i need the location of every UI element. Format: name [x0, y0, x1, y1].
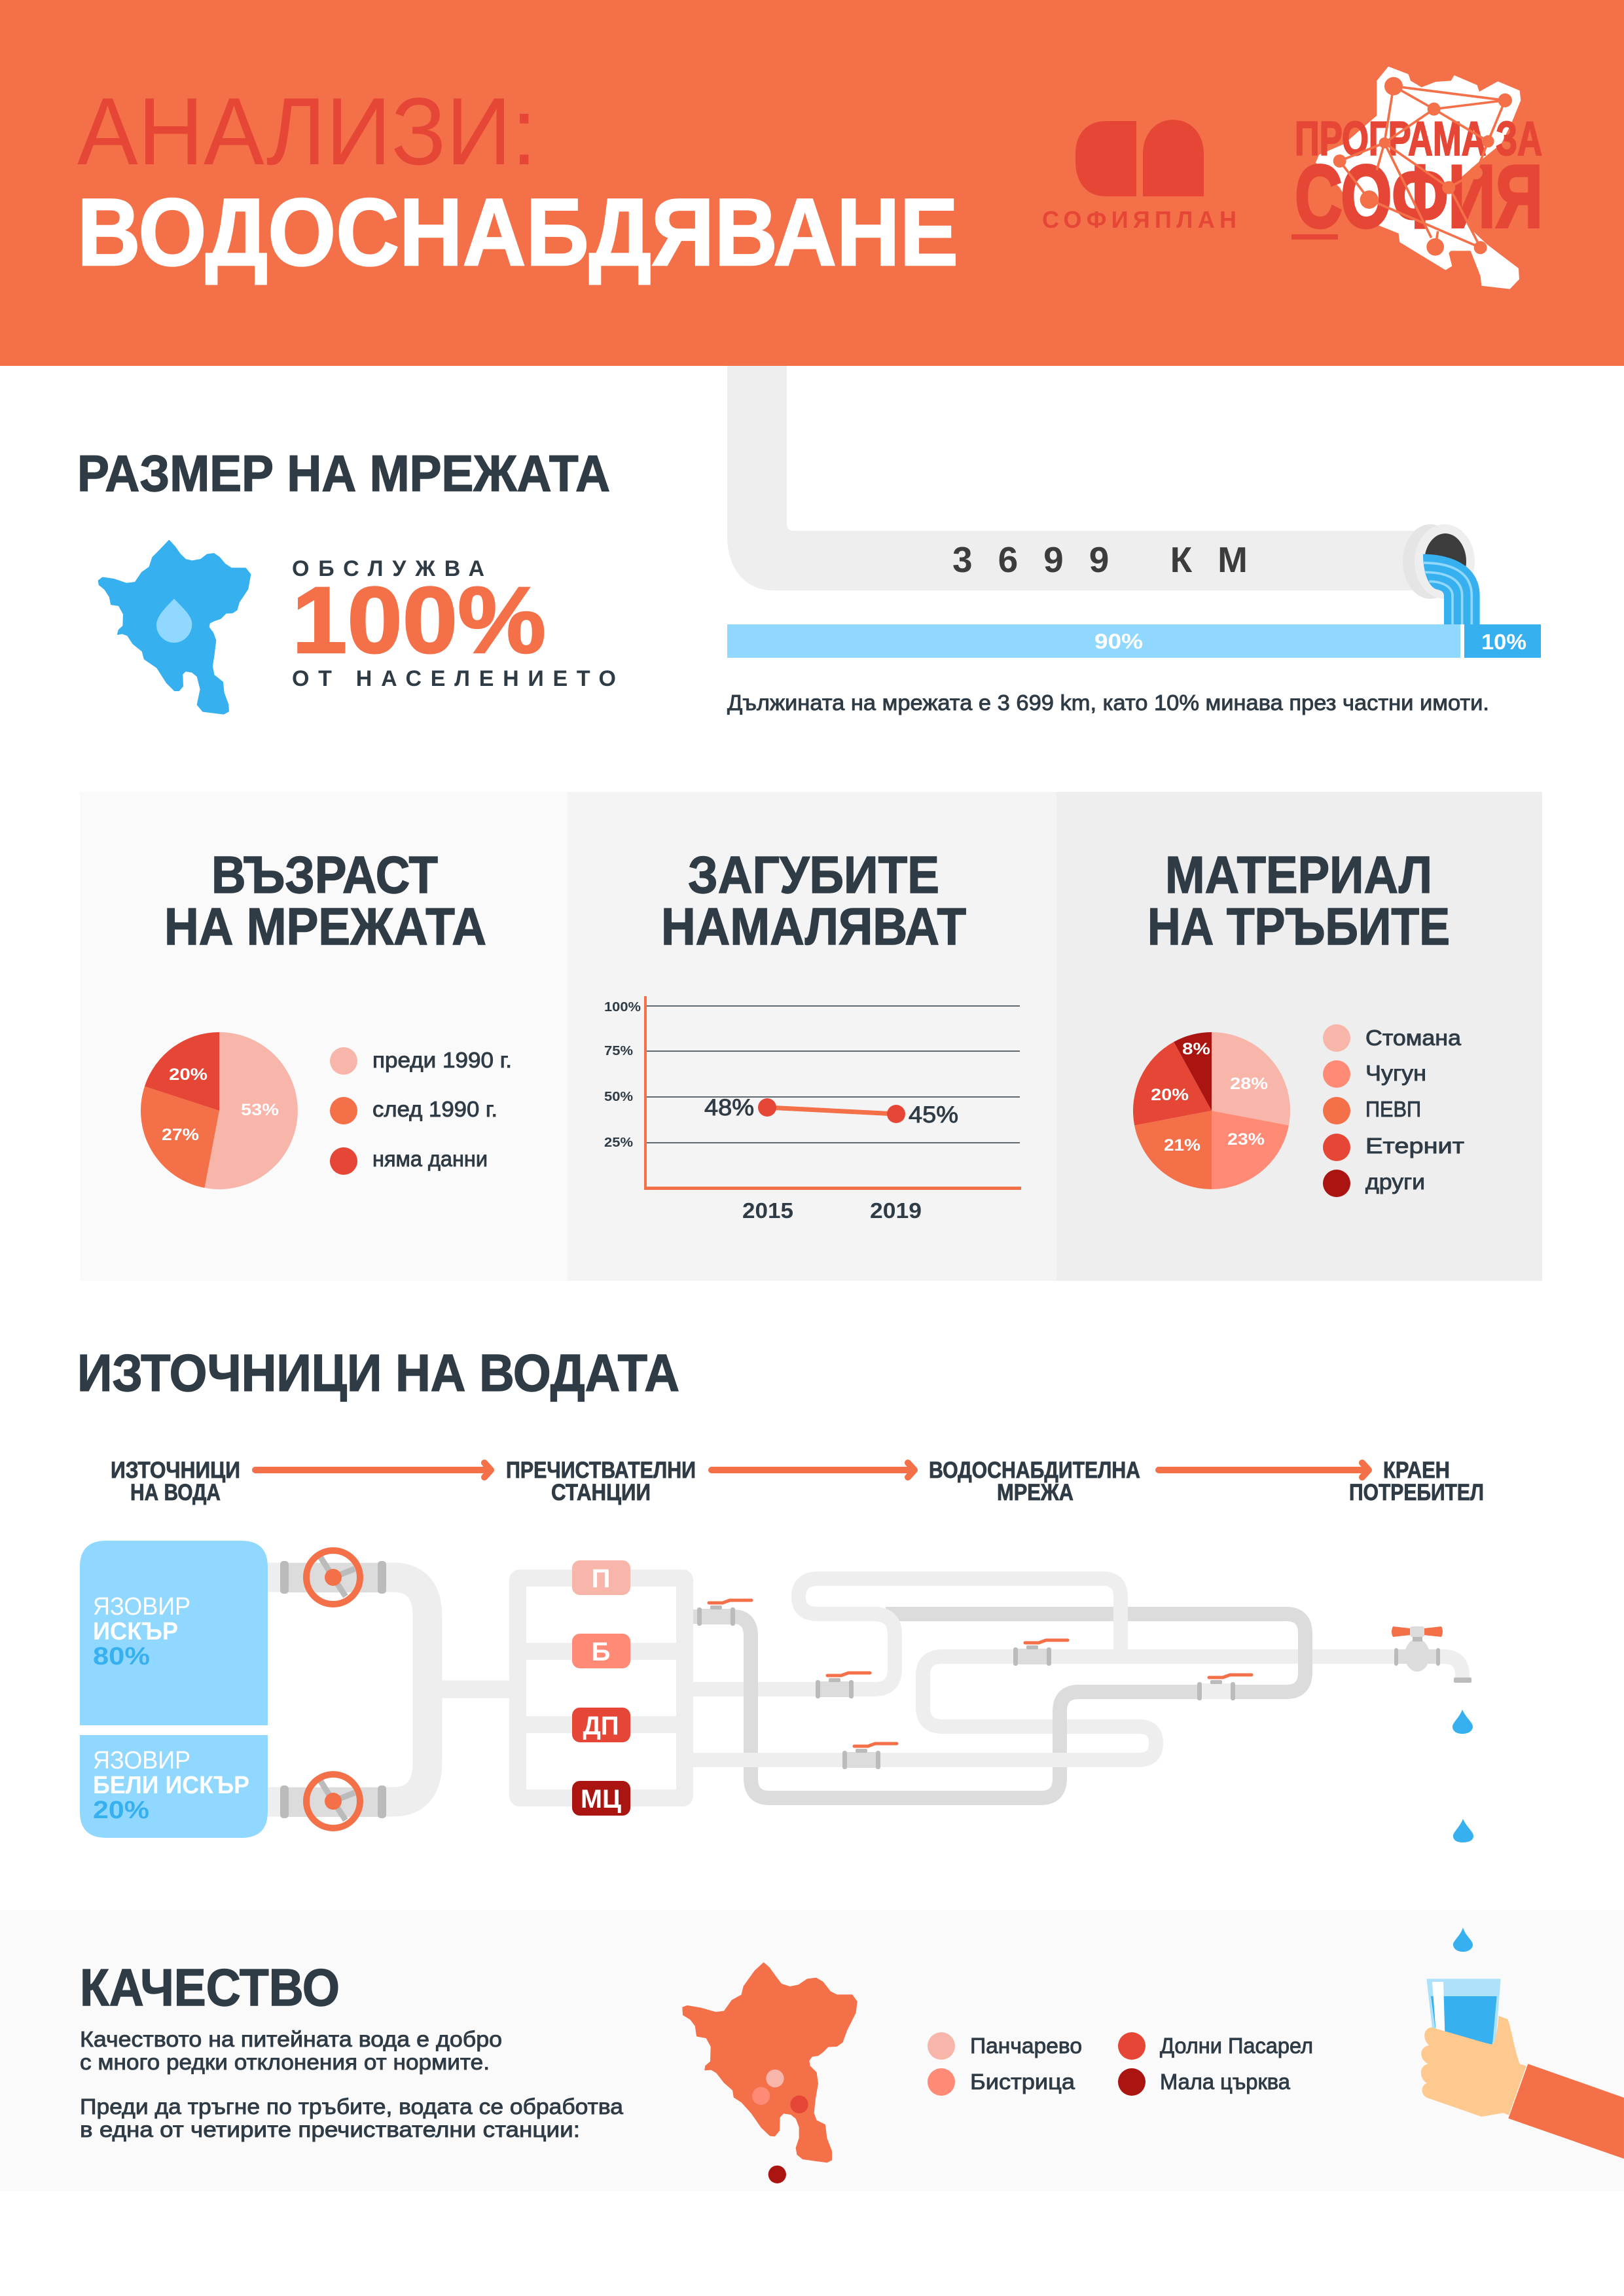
legend: Панчарево — [970, 2034, 1082, 2058]
pie chart: 23% — [1227, 1130, 1265, 1149]
heading: НА ТРЪБИТЕ — [1147, 897, 1450, 956]
reservoir: Beli Iskar: ЯЗОВИР — [93, 1747, 190, 1774]
reservoir: Beli Iskar: 20% — [93, 1797, 149, 1824]
icon: tap — [1392, 1626, 1471, 1683]
line chart — [604, 996, 1021, 1223]
logo: Programme for Sofia: СОФИЯ — [1295, 147, 1543, 246]
logo: Sofiaplan: СОФИЯПЛАН — [1042, 206, 1236, 233]
stacked bar 90/10: 10% — [1481, 630, 1526, 654]
legend: преди 1990 г. — [372, 1048, 512, 1072]
title — [77, 78, 958, 285]
line chart: 25% — [604, 1136, 633, 1150]
legend — [330, 1047, 512, 1175]
small valve 3 — [1013, 1640, 1068, 1666]
pie chart: 28% — [1230, 1075, 1268, 1093]
title: АНАЛИЗИ: — [77, 78, 537, 185]
heading: ЗАГУБИТЕ — [688, 846, 939, 904]
small valve 2 — [816, 1673, 870, 1698]
heading: ВЪЗРАСТ — [211, 846, 438, 904]
small valve 4 — [1197, 1675, 1252, 1700]
water stream — [1423, 554, 1480, 624]
pie chart: 27% — [162, 1126, 199, 1144]
legend: Долни Пасарел — [1160, 2034, 1313, 2058]
stacked bar 90/10 — [727, 624, 1541, 658]
inlet pipes — [268, 1577, 517, 1802]
reservoir: Iskar: ЯЗОВИР — [93, 1593, 190, 1621]
distribution network pipes — [693, 1579, 1401, 1798]
flow labels and arrows: МРЕЖА — [997, 1480, 1074, 1505]
legend — [928, 2032, 1313, 2096]
line chart: 48% — [704, 1095, 754, 1121]
body text — [80, 2027, 624, 2142]
badge: ДП: ДП — [583, 1712, 619, 1740]
line chart: 75% — [604, 1044, 633, 1058]
icon: hand holding glass — [1421, 1979, 1624, 2159]
flow labels and arrows: НА ВОДА — [130, 1480, 221, 1505]
heading — [661, 846, 966, 956]
heading: КАЧЕСТВО — [80, 1958, 340, 2017]
stat: 100% served: ОБСЛУЖВА — [292, 556, 484, 581]
legend: ПЕВП — [1365, 1097, 1421, 1121]
line chart: 2019 — [870, 1198, 922, 1223]
body text: с много редки отклонения от нормите. — [80, 2050, 490, 2074]
small valve 1 — [697, 1600, 751, 1626]
badge: ДП — [572, 1708, 630, 1742]
reservoir: Beli Iskar: БЕЛИ ИСКЪР — [93, 1772, 249, 1799]
panel: network age — [80, 792, 568, 1281]
valve wheel: lower — [280, 1774, 386, 1828]
heading: НА МРЕЖАТА — [164, 897, 486, 956]
stat: 100% served: ОТ НАСЕЛЕНИЕТО — [292, 666, 616, 691]
badge: Б: Б — [592, 1638, 610, 1666]
flow labels and arrows: ПРЕЧИСТВАТЕЛНИ — [506, 1458, 696, 1483]
badge: МЦ: МЦ — [581, 1785, 621, 1814]
heading — [164, 846, 486, 956]
badge: МЦ — [572, 1781, 630, 1816]
flow labels and arrows — [111, 1458, 1484, 1505]
pie chart: 21% — [1164, 1136, 1200, 1155]
pie chart: 20% — [169, 1066, 208, 1084]
flow labels and arrows: ПОТРЕБИТЕЛ — [1349, 1480, 1484, 1505]
reservoir: Iskar — [80, 1541, 268, 1725]
legend: Чугун — [1365, 1061, 1426, 1085]
pie chart — [141, 1032, 298, 1189]
legend: Мала църква — [1160, 2070, 1291, 2094]
reservoir: Iskar: 80% — [93, 1643, 150, 1670]
reservoir: Beli Iskar — [80, 1735, 268, 1838]
legend: Бистрица — [970, 2070, 1075, 2094]
panel: pipe material — [1056, 792, 1542, 1281]
heading — [1147, 846, 1450, 956]
stat: 100% served: 100% — [292, 567, 546, 673]
heading: МАТЕРИАЛ — [1165, 846, 1432, 904]
valve wheel: upper — [280, 1551, 386, 1604]
badge: П — [572, 1560, 630, 1595]
icon: water drops — [1453, 1710, 1473, 1842]
badge: П: П — [592, 1564, 610, 1593]
body text: Преди да тръгне по тръбите, водата се обработва — [80, 2094, 624, 2119]
pipe with length label — [727, 366, 1475, 599]
heading: РАЗМЕР НА МРЕЖАТА — [77, 444, 610, 502]
panel: quality — [0, 1910, 1624, 2191]
icon: blue map with drop — [99, 541, 250, 714]
header band — [0, 0, 1624, 366]
pie chart: 8% — [1182, 1040, 1210, 1058]
badge: Б — [572, 1634, 630, 1668]
flow labels and arrows: ВОДОСНАБДИТЕЛНА — [929, 1458, 1140, 1483]
caption: Дължината на мрежата е 3 699 km, като 10% минава през частни имоти. — [727, 691, 1489, 715]
legend: Стомана — [1365, 1026, 1462, 1050]
panel: losses decreasing — [568, 792, 1056, 1281]
title: ВОДОСНАБДЯВАНЕ — [77, 179, 958, 285]
stat: 100% served — [292, 556, 616, 691]
flow labels and arrows: СТАНЦИИ — [551, 1480, 651, 1505]
line chart: 2015 — [742, 1198, 793, 1223]
heading: НАМАЛЯВАТ — [661, 897, 966, 956]
section heading: water sources: ИЗТОЧНИЦИ НА ВОДАТА — [77, 1344, 679, 1402]
line chart: 100% — [604, 1000, 641, 1014]
pie chart: 20% — [1151, 1086, 1189, 1104]
orange map with station dots — [683, 1963, 857, 2183]
body text: Качеството на питейната вода е добро — [80, 2027, 502, 2051]
pie chart: 53% — [241, 1101, 279, 1119]
flow labels and arrows: КРАЕН — [1383, 1458, 1450, 1483]
legend: Етернит — [1365, 1134, 1464, 1158]
section: network size — [77, 366, 1541, 715]
legend: няма данни — [372, 1147, 488, 1171]
reservoir: Iskar: ИСКЪР — [93, 1618, 178, 1645]
treatment stations manifold — [518, 1560, 685, 1816]
body text: в една от четирите пречиствателни станции: — [80, 2117, 580, 2142]
small valve 5 — [842, 1744, 897, 1769]
logo: Sofiaplan — [1042, 120, 1236, 233]
pie chart — [1133, 1032, 1290, 1189]
legend — [1323, 1024, 1464, 1197]
legend: след 1990 г. — [372, 1097, 497, 1121]
icon: falling drop — [1453, 1928, 1473, 1952]
logo: Programme for Sofia — [1291, 67, 1543, 289]
pipe with length label: 3699 КМ — [952, 539, 1248, 580]
flow labels and arrows: ИЗТОЧНИЦИ — [111, 1458, 240, 1483]
legend: други — [1365, 1170, 1425, 1194]
stacked bar 90/10: 90% — [1094, 630, 1143, 653]
line chart: 50% — [604, 1090, 633, 1104]
line chart: 45% — [909, 1102, 958, 1128]
